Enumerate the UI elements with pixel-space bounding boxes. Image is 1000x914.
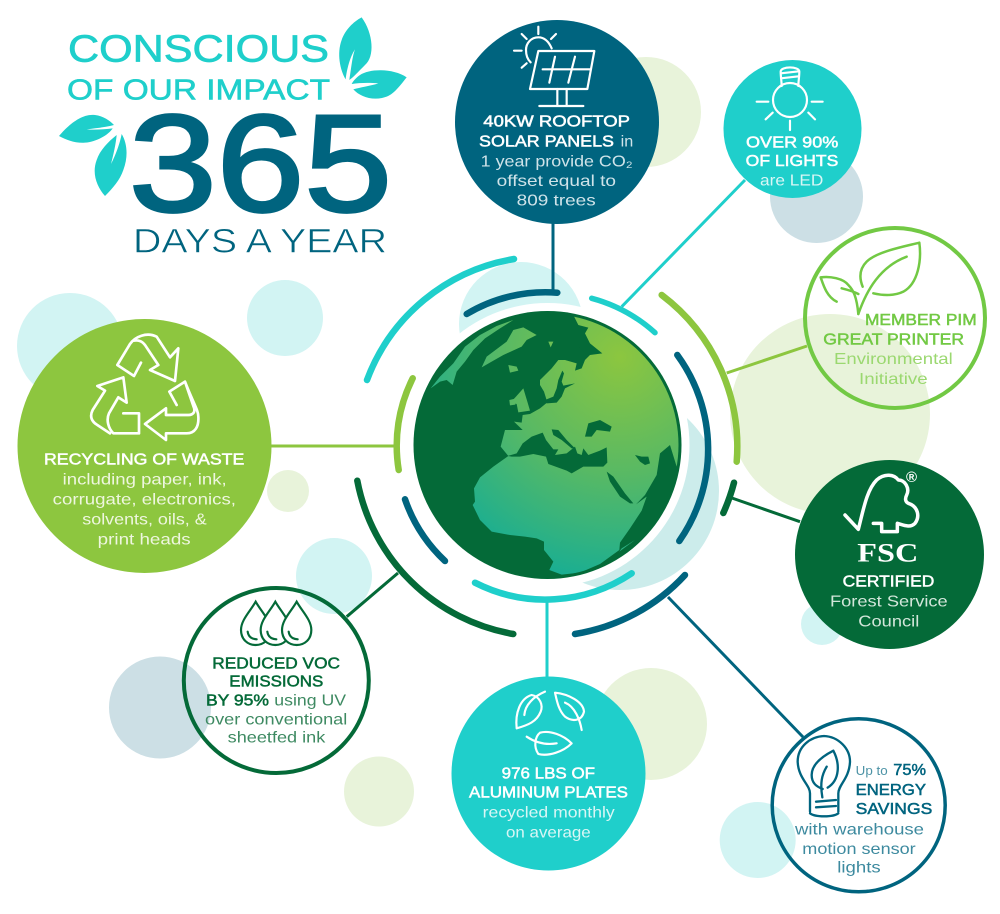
LED text: OF LIGHTS (746, 153, 838, 170)
VOC text: REDUCED VOC (212, 655, 340, 672)
solar text (479, 114, 633, 210)
PIM text (823, 312, 977, 388)
solar text: 809 trees (517, 193, 596, 210)
icon: leaf light bulb (798, 736, 850, 816)
VOC text: EMISSIONS (229, 674, 323, 691)
PIM text: MEMBER PIM (865, 312, 977, 329)
aluminum text: ALUMINUM PLATES (469, 785, 628, 802)
panel: LED lights (724, 60, 862, 198)
icon: solar panel (514, 27, 594, 106)
panel: PIM great printer (805, 228, 985, 408)
LED text (746, 135, 839, 189)
PIM text: GREAT PRINTER (823, 331, 964, 348)
recycling text: solvents, oils, & (82, 511, 207, 528)
recycling text (44, 451, 244, 548)
title text: CONSCIOUS (68, 29, 329, 71)
solar text: SOLAR PANELS (479, 134, 614, 151)
panel: recycling of waste (18, 319, 272, 573)
energy text (794, 762, 932, 877)
aluminum text: on average (506, 824, 591, 841)
solar text: in (621, 134, 633, 151)
energy text: 75% (893, 762, 926, 779)
land masses (431, 307, 693, 575)
icon: light bulb (757, 67, 823, 130)
panel: aluminum plates (452, 676, 646, 870)
FSC text: CERTIFIED (843, 574, 934, 591)
recycling text: RECYCLING OF WASTE (44, 451, 244, 468)
orbit arcs around globe (357, 259, 737, 634)
icon: three leaves (516, 692, 584, 755)
recycling text: corrugate, electronics, (53, 491, 236, 508)
leaves around title (59, 17, 407, 196)
PIM text: Initiative (859, 371, 928, 388)
icon: three droplets (241, 602, 311, 645)
title text: DAYS A YEAR (133, 222, 387, 260)
panel: reduced VOC emissions (184, 588, 369, 773)
VOC text: sheetfed ink (228, 730, 326, 747)
icon: recycling arrows (91, 335, 198, 440)
panel: FSC certified (795, 460, 984, 649)
PIM text: Environmental (834, 351, 953, 368)
solar text: offset equal to (497, 173, 616, 190)
FSC text (830, 574, 948, 631)
energy text: motion sensor (802, 841, 916, 858)
VOC text: BY 95% (206, 693, 269, 710)
VOC text: over conventional (205, 711, 347, 728)
globe (414, 307, 693, 579)
LED text: are LED (760, 172, 823, 189)
FSC logo text: FSC (857, 539, 918, 568)
solar text: 40KW ROOFTOP (483, 114, 630, 131)
FSC logo text: ® (906, 469, 917, 486)
FSC text: Forest Service (830, 594, 948, 611)
title text (67, 29, 392, 260)
solar text: 1 year provide CO₂ (481, 154, 633, 171)
FSC text: Council (858, 614, 919, 631)
aluminum text: recycled monthly (483, 805, 615, 822)
aluminum text (469, 765, 628, 841)
energy text: SAVINGS (856, 801, 932, 818)
title (59, 17, 407, 260)
panel: energy savings (772, 719, 945, 892)
connector lines (268, 180, 807, 737)
aluminum text: 976 LBS OF (502, 765, 595, 782)
panel: solar panels (455, 20, 659, 224)
recycling text: print heads (98, 531, 191, 548)
icon: FSC tree check mark (845, 475, 918, 532)
VOC text (205, 655, 347, 747)
title text: OF OUR IMPACT (67, 74, 330, 106)
energy text: with warehouse (794, 821, 924, 838)
energy text: ENERGY (856, 782, 926, 799)
icon: sprout leaves (821, 243, 920, 314)
energy text: Up to (856, 763, 888, 778)
VOC text: using UV (274, 693, 346, 710)
LED text: OVER 90% (746, 135, 839, 152)
FSC logo text (857, 469, 918, 568)
recycling text: including paper, ink, (63, 471, 227, 488)
energy text: lights (837, 860, 881, 877)
title text: 365 (129, 87, 392, 241)
